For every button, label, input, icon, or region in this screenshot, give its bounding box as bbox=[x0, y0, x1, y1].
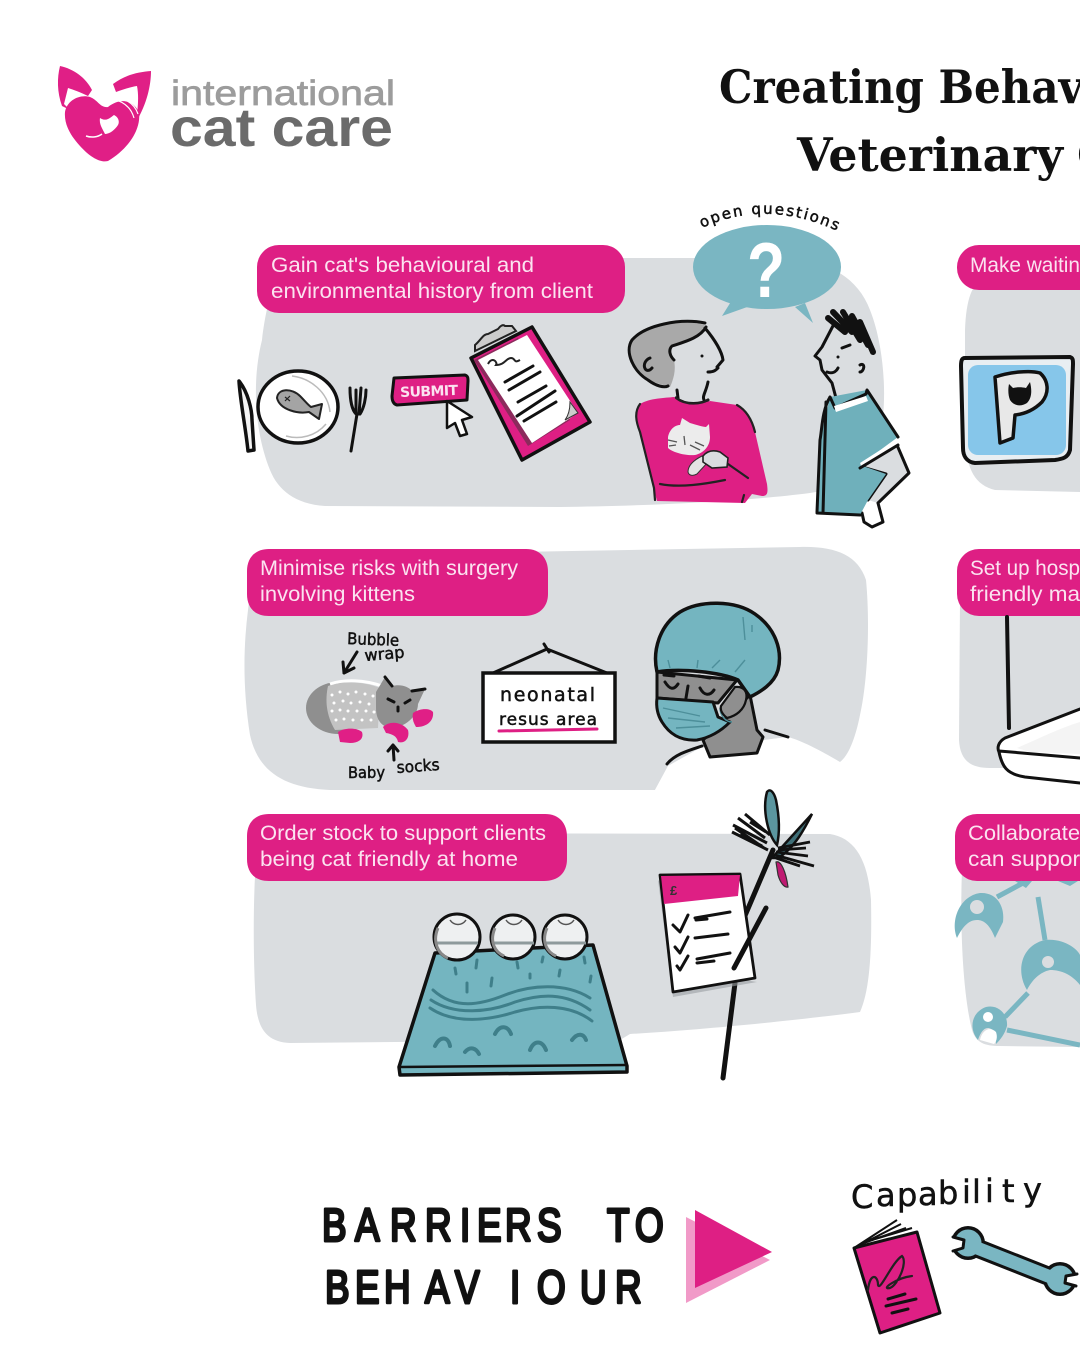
icon: submit button: SUBMIT bbox=[400, 383, 459, 401]
illustration: feather wand bbox=[723, 790, 814, 1078]
woman with cat bbox=[629, 321, 767, 503]
heading: barriers to behaviour bbox=[322, 1199, 664, 1313]
speech bubble bbox=[693, 225, 841, 323]
icon: cat parking sign bbox=[961, 357, 1073, 463]
panel: history from client bbox=[237, 205, 910, 528]
label: open questions: open questions bbox=[700, 205, 840, 230]
arrow: to bubble wrap bbox=[343, 652, 357, 673]
illustration: surgeon bbox=[655, 603, 855, 790]
illustration: litter tray bbox=[998, 617, 1080, 783]
logo wordmark: international bbox=[171, 74, 395, 113]
panel: stock for clients bbox=[247, 790, 871, 1078]
illustration: people network bbox=[955, 881, 1080, 1045]
label: baby socks: Baby bbox=[348, 763, 385, 782]
icon: wrench bbox=[948, 1226, 1080, 1296]
pill heading: Set up hosp bbox=[970, 557, 1080, 580]
pill heading: environmental history from client bbox=[271, 280, 593, 303]
icon: book bbox=[854, 1220, 940, 1333]
logo mark: cat heart bbox=[58, 66, 151, 161]
sign: neonatal resus area: neonatal bbox=[500, 684, 595, 706]
heading: barriers to behaviour: BARRIERS TO bbox=[322, 1199, 664, 1251]
label: bubble wrap: Bubble bbox=[347, 629, 399, 650]
pill heading bbox=[247, 814, 567, 881]
sign: neonatal resus area bbox=[483, 644, 615, 742]
arrow: to baby socks bbox=[388, 745, 398, 760]
pill heading bbox=[247, 549, 548, 616]
panel: hospital litter (cropped) bbox=[957, 549, 1080, 783]
logo bbox=[58, 66, 395, 161]
pill heading: friendly ma bbox=[970, 583, 1080, 606]
illustration: shopping checklist: £ bbox=[670, 883, 678, 898]
label: baby socks bbox=[348, 755, 440, 782]
panel background bbox=[254, 833, 871, 1043]
pill heading: Gain cat's behavioural and bbox=[271, 254, 534, 277]
icon: clipboard bbox=[471, 325, 590, 460]
pill heading bbox=[957, 245, 1080, 290]
pill heading: Make waitin bbox=[970, 254, 1080, 277]
title: Veterinary bbox=[796, 128, 1064, 182]
pill heading: can suppor bbox=[968, 848, 1080, 871]
pill heading: involving kittens bbox=[260, 583, 415, 606]
logo wordmark bbox=[170, 74, 395, 158]
illustration: activity mat with balls bbox=[399, 914, 627, 1075]
panel background bbox=[244, 547, 868, 790]
icon: submit button bbox=[392, 375, 468, 405]
icon: knife bbox=[239, 381, 254, 451]
illustration: kitten in bubble wrap and socks bbox=[306, 677, 433, 743]
speech bubble: ? bbox=[747, 226, 785, 314]
panel background bbox=[961, 870, 1080, 1047]
label: bubble wrap bbox=[347, 629, 405, 665]
panel background bbox=[256, 258, 884, 507]
title bbox=[719, 60, 1080, 182]
pill heading bbox=[957, 549, 1080, 616]
pill heading: Minimise risks with surgery bbox=[260, 557, 519, 580]
panel: make waiting room (cropped) bbox=[957, 245, 1080, 492]
illustration: shopping checklist bbox=[658, 874, 766, 997]
pill heading: Order stock to support clients bbox=[260, 822, 546, 845]
pill heading: being cat friendly at home bbox=[260, 848, 518, 871]
pill heading: Collaborate bbox=[968, 822, 1080, 845]
icon: fork bbox=[350, 388, 366, 451]
label: baby socks: socks bbox=[396, 755, 440, 777]
label: bubble wrap: wrap bbox=[364, 643, 405, 665]
label: capability: Capability bbox=[851, 1171, 1042, 1216]
logo wordmark: cat care bbox=[170, 98, 393, 158]
icon: plate with fish bbox=[258, 371, 338, 443]
pill heading bbox=[257, 245, 625, 313]
panel: surgery with kittens bbox=[244, 547, 868, 790]
sign: neonatal resus area: resus area bbox=[499, 710, 597, 730]
pill heading bbox=[955, 814, 1080, 881]
panel background bbox=[965, 278, 1080, 492]
heading: barriers to behaviour: BEHAVIOUR bbox=[325, 1261, 642, 1313]
icon: cursor bbox=[447, 401, 472, 436]
panel: collaborate (cropped) bbox=[955, 814, 1080, 1047]
panel background bbox=[959, 600, 1080, 768]
arrow: play triangle bbox=[686, 1210, 772, 1303]
man in teal scrubs bbox=[815, 312, 909, 527]
